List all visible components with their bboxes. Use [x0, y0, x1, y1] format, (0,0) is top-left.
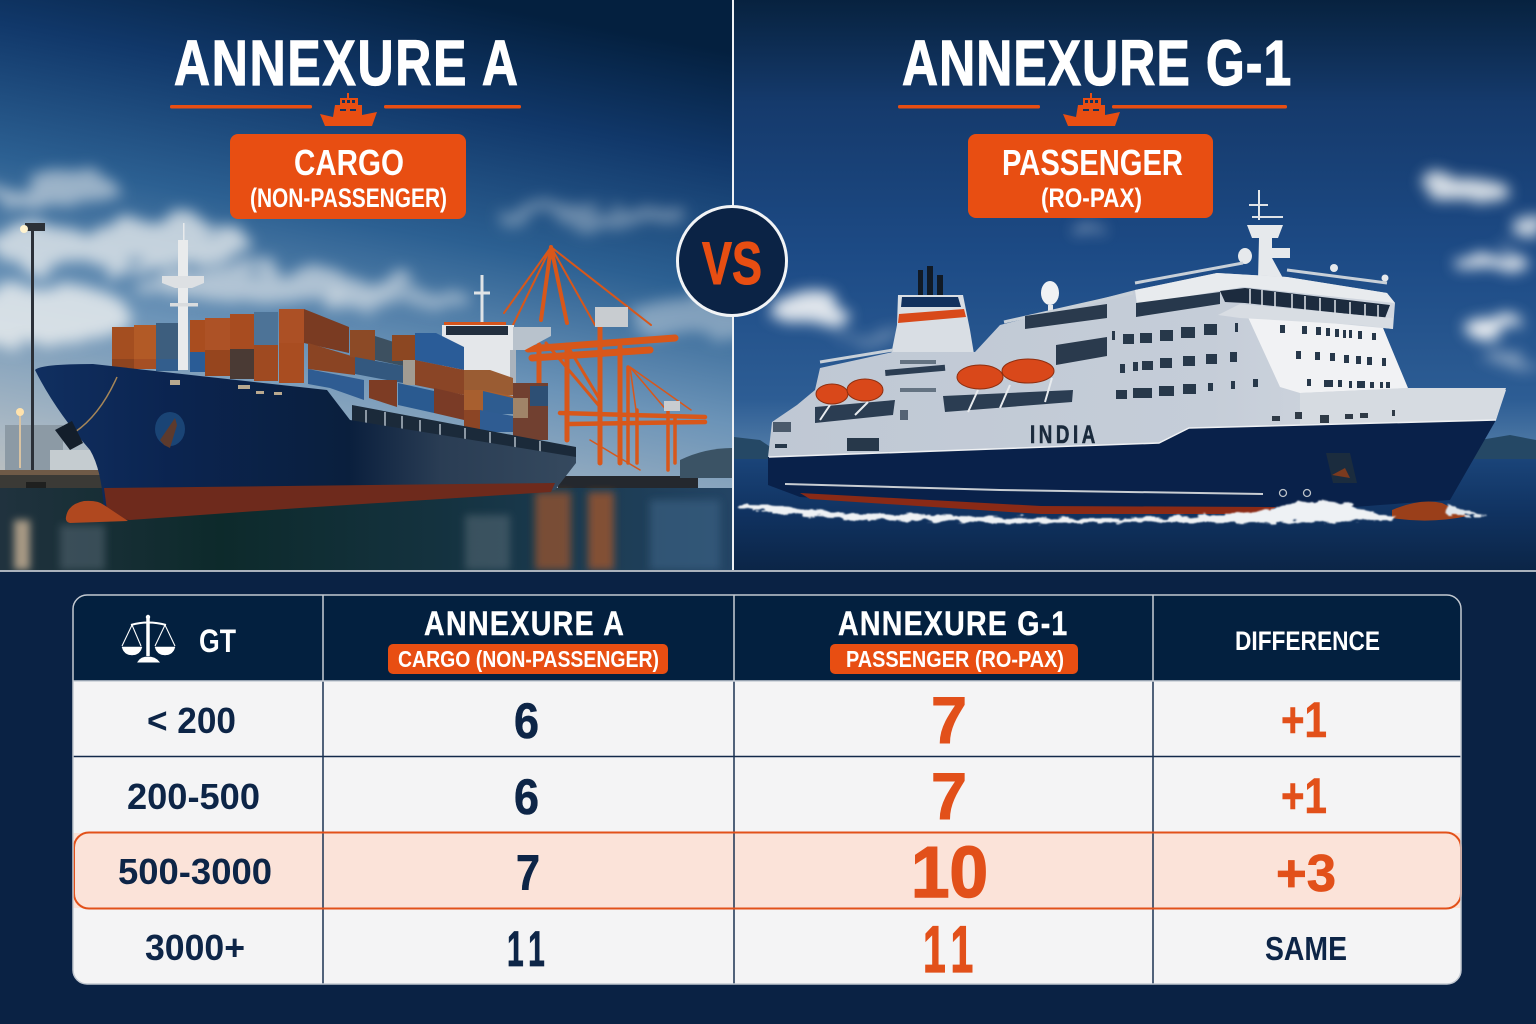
- lifeboats: [816, 359, 1054, 420]
- highlighted row fill: [73, 833, 1461, 908]
- panel: cargo ship photo scene: [0, 0, 750, 570]
- row: 200-500 GT: 200-500: [127, 776, 260, 817]
- panel: passenger ship photo scene: [734, 0, 1536, 570]
- row: 500-3000 GT highlighted: +3: [1276, 845, 1336, 903]
- header: difference: DIFFERENCE: [1235, 626, 1380, 656]
- header: Annexure A: ANNEXURE A: [424, 605, 624, 643]
- row: 3000+ GT: [145, 912, 1347, 986]
- container stacks: [112, 309, 576, 458]
- row: 500-3000 GT highlighted: 10: [911, 833, 988, 913]
- row: 3000+ GT: 3000+: [145, 927, 245, 968]
- floodlight mast: [16, 223, 45, 470]
- row: under 200 GT: 6: [514, 693, 539, 749]
- header: Annexure A: [388, 605, 668, 674]
- header: GT: GT: [199, 623, 236, 659]
- passenger ship mast and radar: [1041, 190, 1388, 323]
- row: under 200 GT: < 200: [147, 700, 236, 741]
- open promenade decks: [815, 365, 1073, 423]
- table header background: [73, 595, 1461, 681]
- center divider line: [732, 0, 734, 570]
- passenger ship hull: [768, 420, 1496, 514]
- row: under 200 GT: [147, 683, 1327, 757]
- row: 500-3000 GT highlighted: 7: [516, 845, 540, 901]
- passenger ship windows: [773, 323, 1395, 451]
- passenger ship superstructure: [768, 263, 1506, 457]
- dock and port buildings: [0, 425, 732, 488]
- vs badge: [678, 206, 786, 316]
- header: Annexure A: CARGO (NON-PASSENGER): [398, 646, 659, 672]
- comparison table: [73, 595, 1461, 986]
- row: 3000+ GT: 11: [507, 921, 545, 977]
- cargo ship hull: [35, 364, 576, 523]
- header: Annexure G-1: [830, 605, 1078, 674]
- header: Annexure G-1: ANNEXURE G-1: [838, 605, 1067, 643]
- row: 200-500 GT: +1: [1281, 768, 1327, 824]
- distant hills: [734, 435, 1536, 460]
- row: 500-3000 GT highlighted: [118, 833, 1336, 913]
- heading: Annexure A: ANNEXURE A: [174, 28, 518, 99]
- cargo ship mast: [162, 223, 204, 370]
- row: under 200 GT: 7: [931, 683, 967, 757]
- heading: Annexure G-1: ANNEXURE G-1: [902, 28, 1291, 99]
- orange gantry cranes: [504, 247, 705, 470]
- badge: passenger (ro-pax): PASSENGER: [1002, 142, 1183, 183]
- row: 3000+ GT: SAME: [1265, 930, 1347, 967]
- icon: balance scales: [122, 615, 175, 662]
- table body background: [73, 681, 1461, 984]
- highlighted row outline: [74, 832, 1461, 908]
- water with reflections: [0, 488, 732, 570]
- row: 500-3000 GT highlighted: 500-3000: [118, 851, 272, 892]
- badge: passenger (ro-pax): (RO-PAX): [1041, 183, 1142, 213]
- funnel: [892, 266, 974, 352]
- badge: passenger (ro-pax): [968, 134, 1213, 218]
- bow wave and wake: [740, 501, 1488, 524]
- row: 200-500 GT: 7: [931, 759, 967, 833]
- header: Annexure G-1: PASSENGER (RO-PAX): [846, 646, 1064, 672]
- badge: cargo (non-passenger): CARGO: [294, 142, 404, 183]
- vs badge: VS: [702, 230, 762, 297]
- badge: cargo (non-passenger): [230, 134, 466, 219]
- row: 200-500 GT: [127, 759, 1327, 833]
- cargo ship superstructure: [442, 275, 551, 405]
- row: under 200 GT: +1: [1281, 692, 1327, 748]
- row: 3000+ GT: 11: [923, 912, 973, 986]
- row: 200-500 GT: 6: [514, 769, 539, 825]
- badge: cargo (non-passenger): (NON-PASSENGER): [250, 183, 447, 213]
- ornament: left heading rule with ship icon: [170, 93, 521, 126]
- ship name INDIA: INDIA: [1030, 420, 1095, 449]
- ornament: right heading rule with ship icon: [898, 93, 1287, 126]
- bottom edge of photos: [0, 570, 1536, 572]
